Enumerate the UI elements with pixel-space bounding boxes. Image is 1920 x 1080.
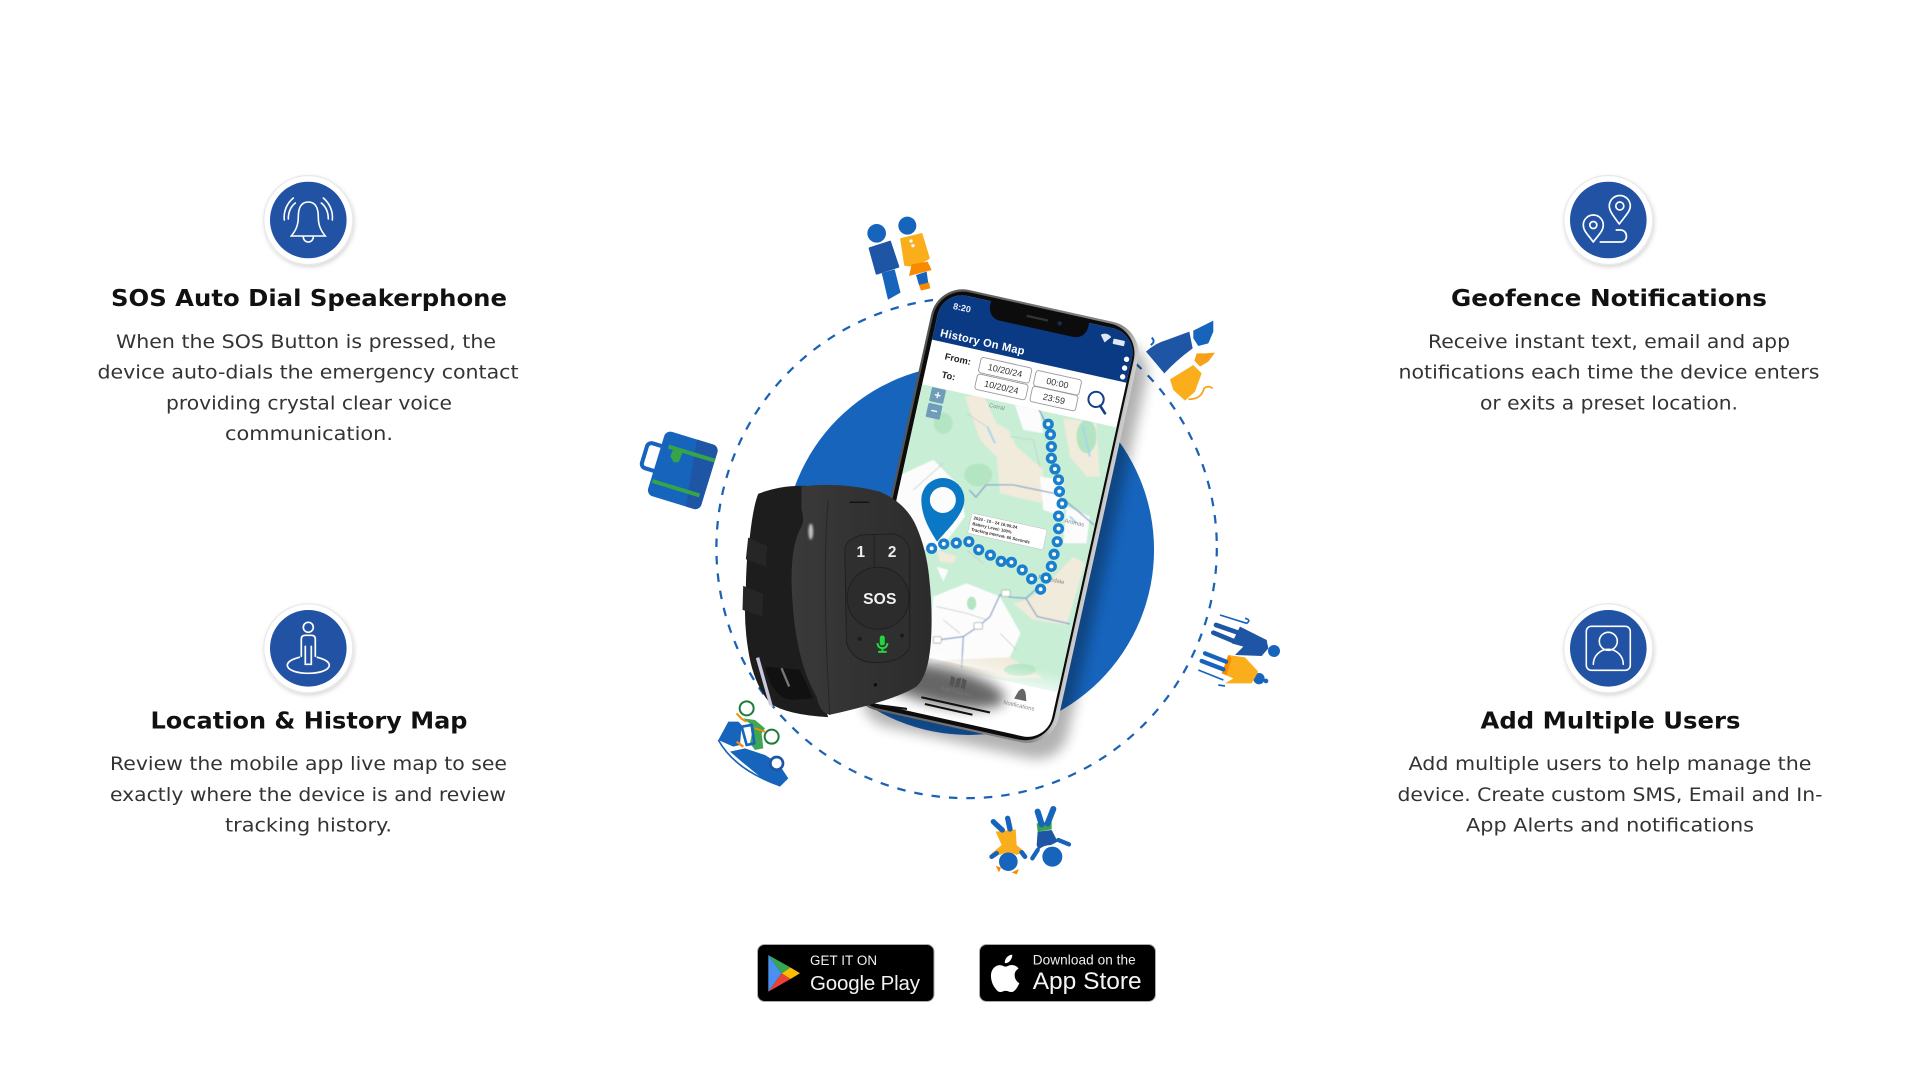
heading: Add Multiple Users: [1480, 708, 1740, 734]
icon: bell: [264, 176, 353, 264]
search icon: [1086, 390, 1109, 413]
icon: play triangle: [768, 955, 800, 992]
panel: Geofence Notifications: [1398, 176, 1820, 414]
badge: App Store: [980, 944, 1156, 1002]
map place labels: Bautista: [1121, 549, 1144, 560]
text block: tracking history.: [225, 816, 392, 836]
dashed orbit circle: [716, 298, 1217, 798]
map upper area: [897, 395, 1100, 550]
phone body and header: [845, 283, 1145, 749]
date and time filters: 00:00: [1045, 376, 1069, 390]
map tooltip: 2024 - 10 - 24 16:09:24: [973, 515, 1018, 530]
tracking route dots: [926, 419, 1068, 595]
icon: apple logo: [991, 955, 1019, 992]
icon: children: [992, 809, 1069, 874]
screen title: History On Map: [939, 327, 1026, 358]
panel: Add Multiple Users: [1398, 604, 1822, 836]
icon: dog and cat: [1146, 321, 1215, 401]
phone: [857, 289, 1154, 766]
panel: Location & History Map: [110, 604, 507, 836]
icon: motorcycle riders: [718, 701, 788, 787]
icon: geofence route pins: [1564, 176, 1653, 264]
zoom buttons: [926, 387, 946, 420]
nav shadow: [890, 658, 1012, 718]
heading: SOS Auto Dial Speakerphone: [111, 286, 507, 312]
zoom buttons: +: [933, 388, 942, 403]
icon: people lying: [1198, 615, 1280, 686]
map place labels: [989, 403, 1084, 584]
text block: Receive instant text, email and app: [1428, 332, 1790, 353]
map lower area: [927, 550, 1085, 678]
text block: [1398, 332, 1820, 414]
text block: providing crystal clear voice: [166, 394, 452, 414]
text block: communication.: [225, 424, 393, 445]
map place labels: Prunedale: [1038, 575, 1065, 586]
menu dots: [1119, 356, 1130, 380]
badge: Google Play: Google Play: [810, 972, 921, 995]
text block: or exits a preset location.: [1480, 394, 1738, 414]
date and time filters: From:: [944, 351, 972, 367]
map place labels: San Juan: [1123, 543, 1148, 554]
bottom nav: [890, 658, 1034, 718]
map place labels: Aromas: [1064, 518, 1085, 529]
text block: device. Create custom SMS, Email and In-: [1398, 785, 1822, 806]
icon: suitcase: [633, 426, 719, 511]
map tooltip: Tracking Interval: 60 Seconds: [971, 527, 1031, 545]
icon: green microphone: [876, 636, 888, 653]
badge: Google Play: GET IT ON: [810, 953, 877, 968]
icon: person on location ring: [264, 604, 353, 693]
watch control panel: [845, 534, 910, 663]
bottom nav: Add Fences: [940, 686, 972, 699]
badge: App Store: App Store: [1033, 968, 1142, 995]
map tooltip: Battery Level: 100%: [972, 521, 1012, 535]
map place labels: San Martin: [1115, 390, 1144, 402]
text block: exactly where the device is and review: [110, 785, 506, 806]
badge: App Store: Download on the: [1033, 952, 1136, 968]
text block: [1398, 754, 1822, 836]
home indicator lines: [921, 697, 990, 715]
date and time filters: 23:59: [1042, 392, 1066, 406]
map tooltip: [968, 513, 1047, 550]
text block: [110, 754, 507, 836]
badge: Google Play: [758, 944, 934, 1002]
watch control panel: 1: [857, 544, 866, 561]
text block: notifications each time the device enters: [1398, 362, 1820, 384]
icon: couple: [867, 217, 932, 299]
heading: Location & History Map: [150, 708, 468, 734]
status bar: 8:20: [952, 301, 972, 315]
watch control panel: 2: [888, 544, 896, 561]
blue disc: [784, 365, 1154, 735]
location pin: [921, 478, 964, 542]
date and time filters: 10/20/24: [987, 362, 1023, 379]
text block: Add multiple users to help manage the: [1408, 754, 1812, 775]
text block: device auto-dials the emergency contact: [98, 362, 518, 384]
watch contact shadow: [871, 704, 907, 709]
icon: user profile: [1564, 604, 1653, 693]
heading: Geofence Notifications: [1451, 286, 1767, 312]
map fade: [863, 630, 1062, 692]
central illustration: [633, 283, 1217, 798]
date and time filters: To:: [941, 369, 957, 382]
text block: When the SOS Button is pressed, the: [116, 332, 496, 353]
watch body: [791, 485, 932, 715]
date and time filters: 10/20/24: [983, 379, 1019, 396]
text block: App Alerts and notifications: [1466, 816, 1754, 836]
watch control panel: SOS: [863, 591, 896, 608]
map place labels: Corral: [988, 403, 1005, 412]
watch strap: [745, 486, 828, 717]
text block: Review the mobile app live map to see: [110, 754, 507, 775]
zoom buttons: −: [929, 404, 939, 418]
bottom nav: Notifications: [1003, 700, 1035, 713]
map: [896, 384, 1116, 692]
date and time filters: [939, 349, 1082, 411]
text block: [98, 332, 518, 445]
phone shadow: [855, 304, 1153, 765]
watch: [743, 485, 932, 717]
panel: SOS Auto Dial Speakerphone: [98, 176, 518, 445]
